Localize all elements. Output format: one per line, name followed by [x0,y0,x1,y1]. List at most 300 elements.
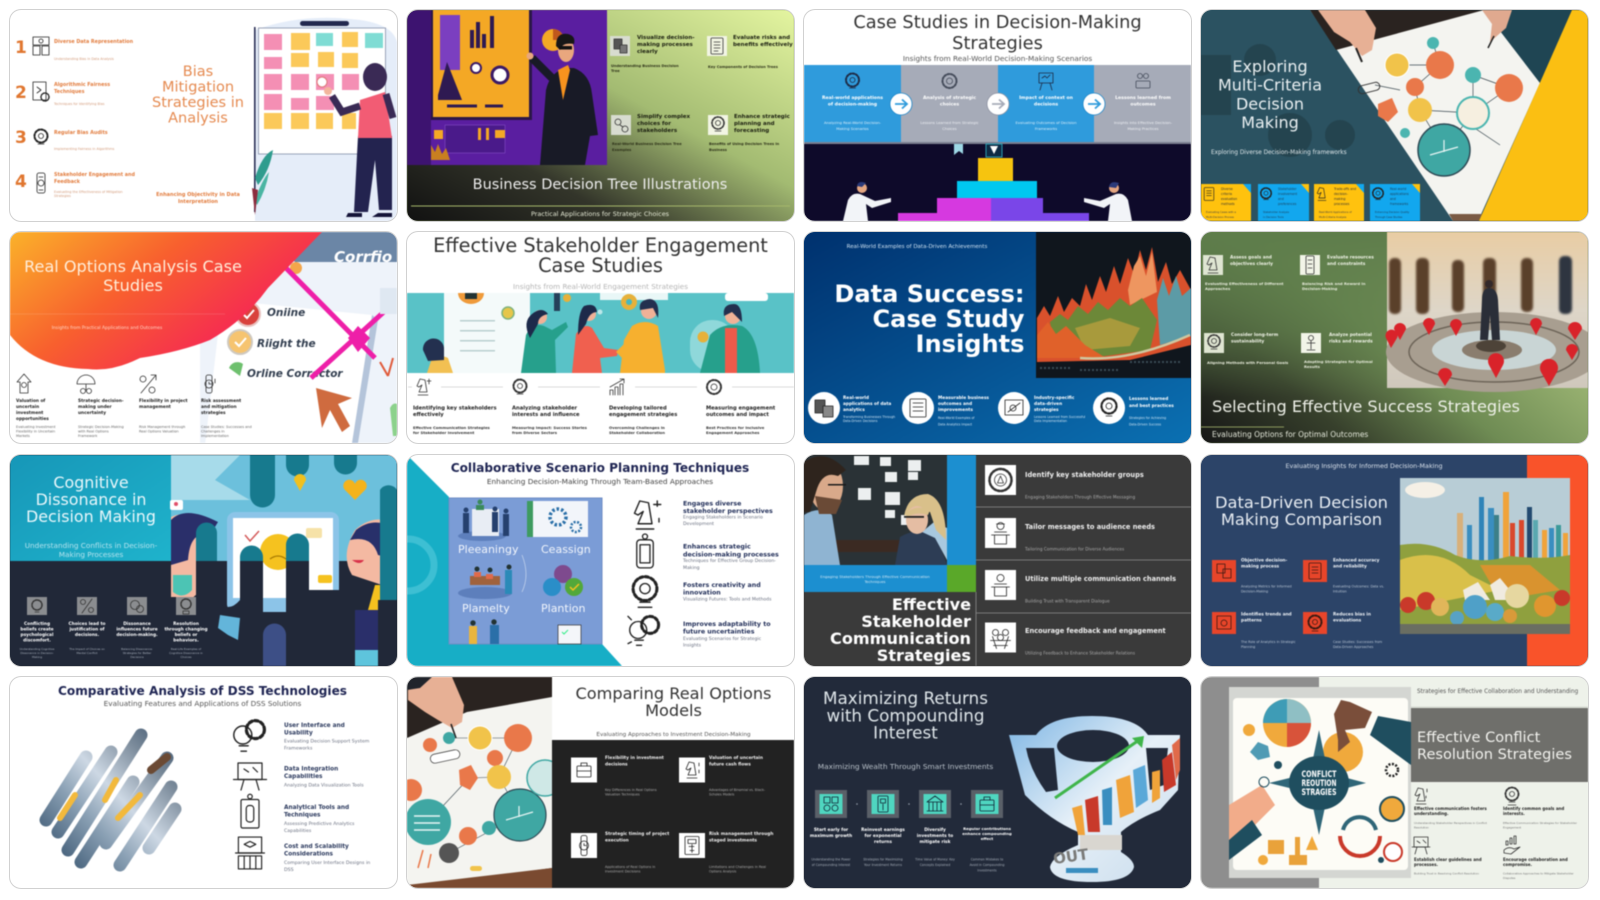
panel: Data Success: Case Study Insights [804,232,1191,443]
subtitle: Real-World Examples of Data-Driven Achievements [847,244,987,250]
subtitle: Interpretation [178,199,218,205]
subtext: Understanding Cognitive [20,647,55,651]
subtext: Limitations and Challenges in Real [709,865,766,869]
icon [1261,188,1271,200]
icon [902,392,934,424]
heading: improvements [938,407,973,413]
heading: Improves adaptability to [683,621,771,628]
heading: Simplify complex [637,114,690,120]
item: Data Integration Capabilities [234,763,364,790]
label: processes [1334,202,1350,206]
icon [205,375,215,393]
subtitle: Making Processes [59,550,123,559]
heading: decisions [1034,102,1058,108]
heading: Real-world [843,395,869,401]
heading: Stakeholder Engagement and [54,172,135,178]
heading: future uncertainties [683,628,755,636]
gradient header shape [10,232,322,370]
icon [708,115,728,135]
subtext: Tailoring Communication for Diverse Audiences [1024,546,1124,552]
card 1: Diverse criteria evaluation methods [1201,184,1251,221]
subtext: Evaluating Investment [16,425,56,429]
illustration: trophy with growth chart: OUT [1052,845,1090,868]
item: Start early for maximum growth [810,790,852,867]
icon [707,36,727,56]
heading: Measurable business [938,395,989,401]
panel: Cognitive Dissonance in Decision Making [10,455,397,666]
drips from top [250,455,397,600]
background illustration: decision map on paper [1201,10,1588,221]
heading: Capabilities [284,774,323,780]
title: Comparative Analysis of DSS Technologies [58,684,347,698]
item: Cost and Scalability Considerations [236,837,370,873]
icon [942,74,956,88]
item: Measurable business outcomes and improvements [902,392,989,426]
step 2 [920,74,979,131]
label: Trade-offs and [1333,187,1356,191]
icon [77,375,95,394]
heading: justification of [68,626,105,632]
heading: Assess goals and [1230,254,1272,260]
item: Reduces bias in evaluations [1303,612,1382,649]
illustration: conflict resolution compass: REOUTION [1302,779,1336,789]
subtext: Time Value of Money: Key [914,858,955,862]
illustration: planning board [449,498,602,644]
subtext: in Decision Tools [1263,215,1284,219]
subtext: Implementation [201,434,229,438]
item: Valuation of uncertain investment opportunities [16,374,56,438]
person: coral top [572,305,618,373]
panel: Business Decision Tree Illustrations [407,10,794,221]
heading: patterns [1241,618,1262,624]
subtext: Key Differences in Real Options [605,788,657,792]
subtext: Lessons Learned from Successful [1034,415,1085,419]
subtext: Flexibility in Uncertain [16,430,55,434]
illustration: two people with device and drips [170,455,397,666]
icon [1204,188,1214,200]
icon [1136,74,1150,88]
illustration: conflict resolution compass: STRAGIES [1302,788,1336,798]
subtext: Analyzing Real-World Decision- [824,121,882,125]
subtext: Collaborative Approaches to Mitigate Stakeholder [1503,872,1574,876]
heading: Reduces bias in [1333,612,1371,618]
item: Industry-specific data-driven strategies [998,392,1085,424]
heading: maximum growth [810,833,852,839]
subtext: Strategies for Maximizing [863,858,903,862]
subtitle: Techniques [863,579,886,584]
illustration: team of people shaking hands [407,293,794,373]
item: Valuation of uncertain future cash flows [679,755,766,796]
item: Enhance strategic planning and forecasting [708,114,790,152]
item: Analyzing stakeholder interests and influence [512,380,588,435]
icon [610,36,630,56]
heading: decisions [605,762,628,768]
label: applications [1390,192,1409,196]
title: Making [1241,113,1299,132]
label: methods [1221,202,1235,206]
item: Regular contributions enhance compounding effect [962,790,1012,872]
subtext: Decision-Making [1302,286,1338,291]
icon [919,790,951,818]
heading: Encourage collaboration and [1503,857,1568,862]
heading: Analysis of strategic [923,95,976,101]
title block [1411,708,1588,782]
heading: Feedback [54,179,81,185]
heading: planning and [734,121,775,127]
icon [985,570,1016,600]
illustration: planning board: Plantion [541,602,586,615]
subtext: Data Implementation [1034,419,1067,423]
icon [1317,188,1326,200]
dark bars rising from bottom [196,522,309,561]
subtext: Engagement Approaches [706,430,760,435]
subtext: Multi-Criteria Analysis [1319,215,1347,219]
item: Risk management through staged investments [679,831,773,874]
heading: choices for [637,121,671,127]
person: teal jacket [521,310,568,373]
subtitle: Insights from Real-World Engagement Strategies [513,282,688,291]
icon [971,790,1003,818]
heading: objectives clearly [1230,261,1273,267]
icon [417,379,431,395]
number 4: 4 [15,172,27,192]
item: Objective decision-making process [1212,558,1292,594]
subtext: Concepts Explained [920,863,950,867]
title: Decision [1236,94,1304,114]
heading: Enhances strategic [683,544,751,550]
heading: behaviors. [173,638,199,644]
subtext: Approaches [1205,286,1231,291]
heading: Techniques [284,812,321,818]
label: and [1390,197,1396,201]
subtitle: Evaluating Features and Applications of DSS Solutions [104,699,302,708]
icon [679,833,705,858]
item: Enhances strategic decision-making processes [637,534,779,571]
icon [1301,333,1321,353]
label: and [1278,197,1284,201]
item: Strategic decision-making under uncertainty [77,375,124,438]
title: with Compounding [826,706,985,726]
subtext: Understanding Business Decision [611,64,679,68]
subtext: Risk Management through [139,425,185,429]
heading: Cost and Scalability [284,844,349,850]
illustration: online checklist screen with pointer: Oniine [267,307,305,319]
subtext: Evaluating Decision Support System [284,738,370,744]
icon [234,721,264,751]
number 2: 2 [15,83,27,103]
panel: Exploring Multi-Criteria Decision Making [1201,10,1588,221]
subtext: Applications of Real Options in [605,865,655,869]
subtext: Decisions [130,655,144,659]
item: Visualize decision-making processes clearly [610,35,695,73]
icon [1373,188,1383,200]
subtitle: Exploring Diverse Decision-Making frameworks [1211,150,1347,156]
item: Encourage collaboration and compromise [1503,836,1574,880]
panel: Comparing Real Options Models [407,677,794,888]
item: Strategic timing of project execution [571,831,669,874]
label: Stakeholder [1278,187,1297,191]
item: Evaluate resources and constraints [1300,254,1374,291]
subtext: Balancing Dissonance: [121,647,153,651]
label: making [1334,197,1346,201]
item: Conflicting beliefs create psychological discomfort [20,597,55,659]
item: Evaluate risks and benefits effectively [707,35,793,69]
subtext: Advantages of Binomial vs. Black- [709,788,766,792]
subtext: Making Scenarios [836,127,869,131]
subtext: Strategies for Better [123,651,152,655]
heading: stakeholders [637,128,678,134]
heading: making processes [637,42,693,48]
subtext: Making [32,655,42,659]
step 1 [822,74,883,131]
subtitle: Strategies for Effective Collaboration and Understanding [1417,689,1579,695]
subtext: Assessing Predictive Analytics [284,821,355,827]
subtext: Evaluating the Effectiveness of Mitigation [54,190,123,194]
title: Dissonance in [36,490,146,509]
heading: Analyze potential [1329,332,1372,338]
icon [27,597,47,615]
icon [633,577,657,607]
heading: Risk management through [709,831,773,837]
subtext: Investments [977,868,997,872]
title: Real Options Analysis Case [24,257,242,276]
title: Case Study [872,305,1025,333]
heading: decision-making processes [683,552,779,558]
label: Diverse [1221,187,1233,191]
subtext: Avoid in Compounding [970,863,1004,867]
heading: investments to [917,833,953,839]
item: Fosters creativity and innovation [633,577,772,607]
title: Cognitive [53,473,129,492]
heading: Strategic decision- [78,398,124,404]
heading: Identify key stakeholder groups [1025,471,1144,479]
panel: Case Studies in Decision-Making Strategies [804,10,1191,221]
subtitle: Practical Applications for Strategic Choices [531,210,670,218]
subtext: Data-Driven Approaches [1333,645,1374,649]
heading: Analytical Tools and [284,805,349,811]
subtitle: Insights from Practical Applications and Outcomes [52,325,163,331]
illustration: planning board: Pleeaningy [458,543,519,556]
heading: Reinvest earnings [861,827,905,833]
illustration: conflict resolution compass: CONFLICT [1302,770,1337,780]
subtext: Engagement [1503,826,1522,830]
subtext: Evaluating Outcomes: Data vs. [1333,584,1384,588]
illustration: planning board: Plamelty [462,602,510,615]
panel: Data-Driven Decision Making Comparison [1201,455,1588,666]
label: preferences [1278,202,1297,206]
item: Risk assessment and mitigation strategies [201,375,252,438]
item: Identifying key stakeholders effectively [413,379,497,435]
heading: and mitigation [201,404,237,410]
icon [707,380,721,394]
photo: hand drawing decision map on paper [400,677,563,888]
icon [1212,560,1236,582]
item: Utilize multiple communication channels [985,570,1176,604]
subtitle: Understanding Conflicts in Decision- [25,541,158,550]
heading: Identify common goals and [1503,806,1564,811]
label: involvement [1278,192,1298,196]
subtext: Frameworks [1035,127,1057,131]
item: Identify key stakeholder groups [985,465,1144,500]
heading: decision-making. [116,632,158,638]
process band [804,65,1191,143]
heading: Strategic timing of project [605,831,669,837]
icon [37,173,45,193]
item: Assess goals and objectives clearly [1203,254,1284,291]
heading: stakeholder perspectives [683,508,773,515]
heading: clearly [637,49,658,55]
subtext: of Compounding Interest [812,863,851,867]
heading: Enhanced accuracy [1333,558,1380,564]
heading: sustainability [1231,338,1264,344]
heading: Valuation of uncertain [709,755,763,761]
title: Data Success: [834,280,1024,308]
subtext: Dissonance in Decision- [20,651,54,655]
heading: Conflicting [24,621,50,627]
heading: benefits effectively [733,42,793,48]
subtext: Engaging Stakeholders Through Effective Messaging [1025,494,1135,500]
title: Interest [873,722,938,742]
item: Regular Bias Audits [34,130,115,151]
heading: uncertainty [78,410,106,416]
subtitle: Enhancing Decision-Making Through Team-Based Approaches [487,477,713,486]
subtext: Visualizing Futures: Tools and Methods [683,596,772,602]
subtext: Valuation Techniques [605,792,640,796]
item: Consider long-term sustainability [1204,332,1289,365]
heading: Evaluate resources [1327,254,1374,260]
icon [611,115,631,135]
heading: Techniques [54,89,85,95]
illustration: businessman at purple data wall [407,10,607,165]
subtext: Analyzing Data Visualization Tools [284,782,364,788]
subtext: Results [1304,364,1321,369]
item: Simplify complex choices for stakeholders [611,114,690,152]
icon [33,82,49,101]
item: Engages diverse stakeholder perspectives [634,500,773,529]
item: Dissonance influences future decision-making [116,597,158,659]
title block: Effective Conflict [1417,729,1541,746]
subtext: Engaging Stakeholders in Scenario [683,514,763,520]
subtext: Building Trust with Transparent Dialogue [1025,598,1110,604]
heading: Dissonance [123,621,151,627]
heading: applications of data [843,401,891,407]
subtext: Data-Driven Decisions [843,419,878,423]
subtext: Real-World Examples of [938,416,975,420]
person: yellow jacket [616,299,665,373]
subtext: Insights into Effective Decision- [1114,121,1173,125]
heading: outcomes and [938,401,972,407]
label: evaluation [1221,197,1237,201]
heading: making under [78,404,112,410]
heading: Encourage feedback and engagement [1025,627,1166,635]
illustration: diagonal striped photo collage [46,735,175,865]
title: Comparing Real Options [576,684,771,703]
icon [34,130,48,144]
arrow 2 [987,93,1009,115]
title: Stakeholder [861,612,971,631]
heading: Start early for [814,827,849,833]
panel: Effective Stakeholder Engagement Case Studies [407,232,794,443]
number 3: 3 [15,128,27,148]
heading: psychological [21,632,54,638]
heading: investment [16,410,43,416]
icon [867,790,899,818]
subtext: Measuring Impact: Success Stories [512,425,588,430]
subtext: Strategies for Achieving [1129,416,1166,420]
panel: Comparative Analysis of DSS Technologies [10,677,397,888]
heading: execution [605,838,629,844]
illustration: planning board: Ceassign [541,543,591,556]
icon [1212,612,1236,634]
subtext: Framework [78,434,98,438]
icon [628,616,659,645]
heading: engagement strategies [609,412,677,418]
item: Flexibility in investment decisions [571,755,664,796]
subtext: Data-Driven Success [1129,422,1162,426]
heading: interests. [1503,811,1525,816]
subtext: Challenges in [201,430,225,434]
label: decision- [1334,192,1348,196]
item: Lessons learned and best practices [1093,392,1174,426]
title: Analysis [168,110,228,126]
subtext: Implementing Fairness in Algorithms [54,147,115,151]
subtext: Mental Conflict [76,651,98,655]
subtext: Understanding Bias in Data Analysis [54,57,114,61]
subtext: DSS [284,867,294,873]
subtext: Strategies [54,194,71,198]
heading: User Interface and [284,723,345,729]
heading: Usability [284,730,313,736]
heading: through changing [164,626,208,632]
subtext: Insights [683,642,702,648]
heading: Flexibility in project [139,398,188,404]
step 4 [1114,74,1173,131]
heading: strategies [1034,407,1059,413]
card 4: Real-world applications and frameworks [1370,184,1420,221]
heading: Valuation of [16,398,45,404]
subtext: Best Practices for Inclusive [706,425,765,430]
subtext: Common Mistakes to [971,858,1003,862]
icon [1300,255,1320,275]
icon [634,501,661,529]
heading: and reliability [1333,564,1367,570]
icon [985,518,1016,548]
icon [610,379,624,395]
illustration: figure on target surrounded by red pins [1386,232,1600,392]
heading: data-driven [1034,401,1062,407]
heading: Evaluate risks and [733,35,790,41]
heading: returns [874,839,892,845]
heading: forecasting [734,128,769,134]
heading: Effective communication fosters [1414,806,1487,811]
title: Decision Making [26,507,156,526]
title: Business Decision Tree Illustrations [473,177,727,193]
icon [1303,612,1327,634]
subtext: Real-World Business Decision Tree [612,142,682,146]
icon [127,597,147,615]
number 1: 1 [15,38,27,58]
subtext: Real-Life Examples of [171,647,202,651]
heading: and constraints [1327,261,1366,267]
title: Bias [183,64,213,80]
heading: enhance compounding [962,831,1012,836]
illustration: trophy with growth chart [1009,716,1180,882]
heading: Fosters creativity and [683,582,761,589]
subtext: Transforming Businesses Through [842,415,895,419]
heading: Objective decision- [1241,558,1287,564]
title: Case Studies in Decision-Making [853,13,1142,33]
arrow 1 [890,93,912,115]
